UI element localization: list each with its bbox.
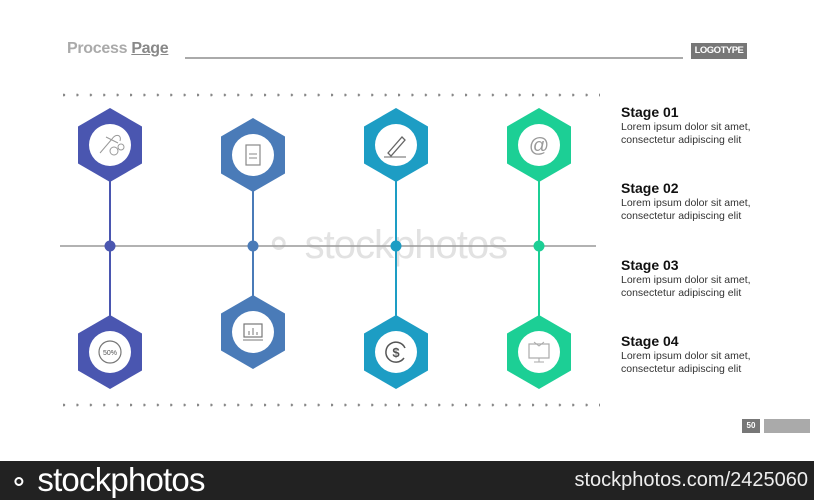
hex 1 bottom: discount: 50%	[103, 350, 117, 357]
title: Process Page	[67, 40, 168, 57]
stage 03: Lorem ipsum dolor sit amet,	[621, 274, 751, 286]
stage 04: consectetur adipiscing elit	[621, 363, 741, 375]
header rule	[185, 57, 683, 59]
stage 03: Stage 03	[621, 257, 679, 273]
stage 02: Lorem ipsum dolor sit amet,	[621, 197, 751, 209]
hex 4 bottom: monitor mail	[507, 315, 571, 389]
stage 04	[621, 333, 751, 375]
stage 01: Lorem ipsum dolor sit amet,	[621, 121, 751, 133]
hex 4 top: at sign: @	[529, 135, 549, 157]
hex 3 top: pencil	[364, 108, 428, 182]
hex 1 bottom: discount	[78, 315, 142, 389]
stage 01	[621, 104, 751, 146]
page number	[742, 419, 760, 433]
stage 01: Stage 01	[621, 104, 679, 120]
stage 03: consectetur adipiscing elit	[621, 287, 741, 299]
logotype	[691, 43, 747, 59]
hex 2 top: clipboard	[221, 118, 285, 192]
stage 02	[621, 180, 751, 222]
hex 2 bottom: chart board	[221, 295, 285, 369]
hex 3 bottom: dollar refresh: $	[392, 345, 400, 360]
stage 02: Stage 02	[621, 180, 679, 196]
hex 3 bottom: dollar refresh	[364, 315, 428, 389]
hex 1 top: scissors	[78, 108, 142, 182]
stage 04: Stage 04	[621, 333, 679, 349]
hex 4 top: at sign	[507, 108, 571, 182]
page bar	[764, 419, 810, 433]
stage 01: consectetur adipiscing elit	[621, 134, 741, 146]
footer url: stockphotos.com/2425060	[574, 469, 808, 491]
timeline	[60, 180, 596, 318]
stage 02: consectetur adipiscing elit	[621, 210, 741, 222]
logotype: LOGOTYPE	[695, 45, 743, 56]
watermark: ⚬ stockphotos	[262, 223, 507, 267]
stage 03	[621, 257, 751, 299]
footer bar	[0, 461, 814, 500]
stage 04: Lorem ipsum dolor sit amet,	[621, 350, 751, 362]
page number: 50	[747, 421, 755, 430]
footer logo: ⚬ stockphotos	[8, 461, 205, 498]
